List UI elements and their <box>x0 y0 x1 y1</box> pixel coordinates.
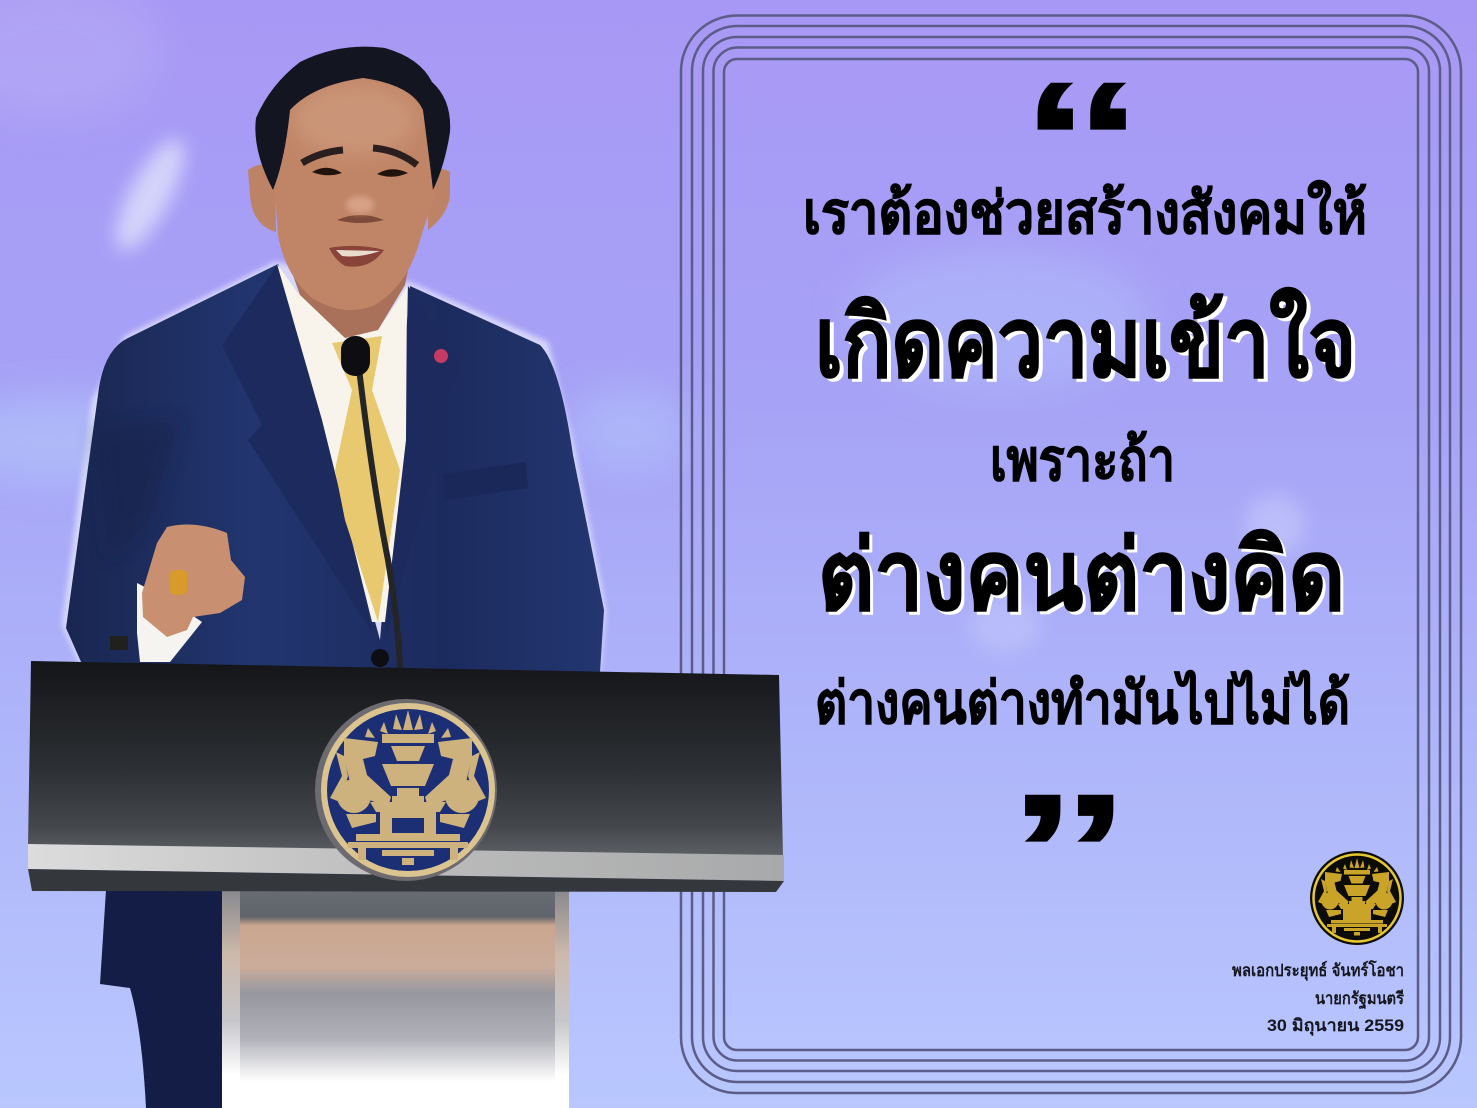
lectern top <box>28 661 784 892</box>
body glow <box>62 262 606 672</box>
closing quote: ” <box>1006 760 1132 945</box>
mouth <box>329 246 384 267</box>
ears <box>248 164 450 232</box>
emblem <box>330 710 486 865</box>
background light patches <box>0 0 1305 653</box>
tie <box>332 336 400 622</box>
line 2 emphasised: เกิดความเข้าใจ <box>819 291 1360 400</box>
figure: speaker <box>62 47 606 1108</box>
nose highlight <box>346 196 374 214</box>
nose <box>337 215 384 223</box>
line 5: ต่างคนต่างทำมันไปไม่ได้ <box>815 670 1350 736</box>
neck <box>284 250 412 338</box>
line 4 emphasised: ต่างคนต่างคิด <box>821 524 1348 633</box>
position: นายกรัฐมนตรี <box>1315 988 1405 1010</box>
signature block <box>1232 960 1405 1036</box>
lapel pin <box>434 349 448 363</box>
eyebrows <box>302 148 417 165</box>
cuff <box>137 583 202 662</box>
line 1: เราต้องช่วยสร้างสังคมให้ <box>803 179 1367 246</box>
ring <box>170 570 187 595</box>
pocket <box>443 462 528 500</box>
left lapel <box>222 264 372 632</box>
line 2 emphasised: เกิดความเข้าใจ <box>815 288 1356 397</box>
suit jacket <box>66 264 604 672</box>
forehead highlight <box>293 84 417 156</box>
line 3: เพราะถ้า <box>990 428 1175 493</box>
opening quote: “ <box>1019 48 1145 233</box>
sleeve buttons <box>110 636 128 650</box>
eyes <box>312 168 408 177</box>
name: พลเอกประยุทธ์ จันทร์โอชา <box>1232 960 1404 981</box>
lower suit <box>100 890 222 1108</box>
teeth <box>336 250 380 256</box>
lectern lower edge <box>28 869 784 892</box>
decorative frame <box>681 16 1461 1093</box>
line 4 emphasised: ต่างคนต่างคิด <box>818 521 1345 630</box>
small seal <box>1310 851 1404 945</box>
lectern seal <box>315 699 497 881</box>
head <box>272 65 438 310</box>
right lapel <box>385 286 462 640</box>
lectern silver band <box>28 844 784 881</box>
shirt collar <box>277 264 407 622</box>
hair <box>255 47 450 190</box>
hand <box>142 525 245 637</box>
date: 30 มิถุนายน 2559 <box>1267 1016 1404 1036</box>
sleeve shadow <box>95 420 180 560</box>
lectern pedestal <box>222 888 569 1108</box>
microphone <box>341 336 400 668</box>
